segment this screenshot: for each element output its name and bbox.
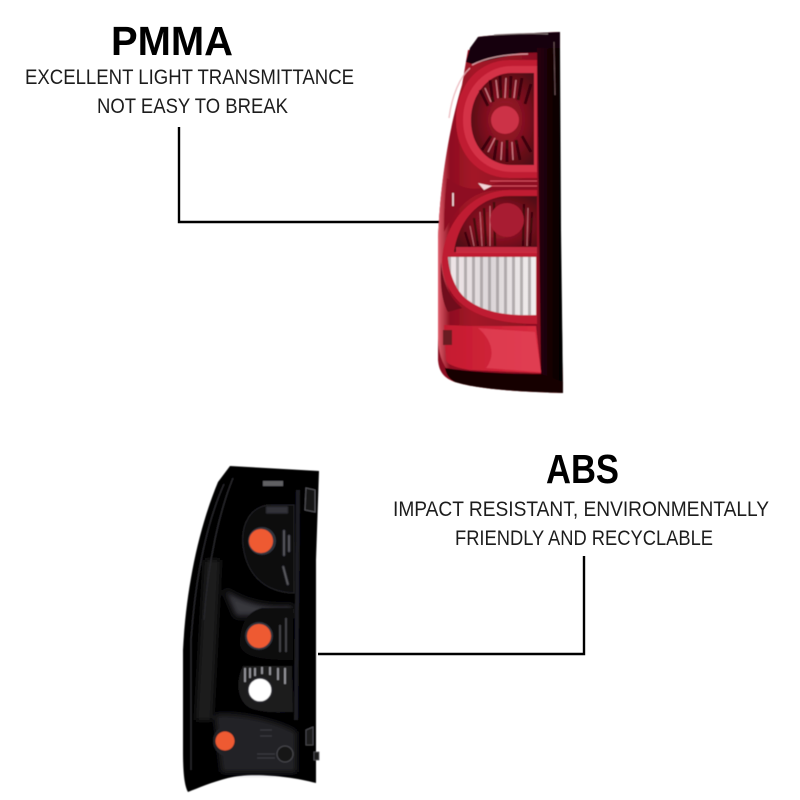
upper socket recess [243,505,294,593]
highlight lines [449,54,528,118]
middle socket reflections [280,618,286,652]
lower lens ring [442,190,537,324]
bottom orange socket [216,732,234,750]
middle orange socket [245,622,273,650]
dark side shadow [441,262,462,312]
white reverse lens [448,257,536,315]
lower socket reflections [245,667,285,684]
back housing [183,466,319,792]
text block: PMMA properties [25,66,354,118]
lamp red body [438,50,538,372]
text block: PMMA properties: NOT EASY TO BREAK [97,95,288,118]
round screw boss [277,746,293,762]
bottom clip [306,727,319,760]
upper lens facets [480,76,531,162]
heading: PMMA: PMMA [111,18,233,64]
heading: ABS: ABS [546,446,619,492]
middle socket recess [240,608,293,660]
lamp outer housing [438,32,563,393]
black right band [537,48,563,393]
lower socket recess [238,666,293,712]
white lens ribs [448,257,538,317]
text block: ABS properties [393,498,769,550]
text block: ABS properties: IMPACT RESISTANT, ENVIRONMENTALLY [393,498,769,521]
white socket [248,678,272,702]
right vertical rib [296,490,298,720]
top clip [305,488,315,512]
black bottom edge [445,368,563,393]
upper lens ring [456,60,537,178]
upper socket reflections [266,510,289,585]
moulded text marks [257,730,275,758]
upper orange socket [248,527,276,555]
icon: back of black tail light [183,466,319,792]
side marker [443,330,452,345]
icon: front of red tail light [438,32,563,393]
bottom orange socket recess [213,725,245,757]
top highlight [263,481,283,486]
text block: ABS properties: FRIENDLY AND RECYCLABLE [455,527,713,550]
divider between lenses [444,178,537,232]
housing soft highlights [196,560,296,772]
arrow: PMMA leader line [179,127,440,222]
upper lens centre dome [488,103,522,137]
lower red reflector [444,325,541,373]
lower red lens [454,196,537,252]
left edge highlights [191,478,233,770]
arrow: ABS leader line [318,556,584,654]
upper lens [471,73,534,165]
text block: PMMA properties: EXCELLENT LIGHT TRANSMITTANCE [25,66,354,89]
black top edge [466,32,560,64]
lower lens facets [465,202,532,248]
lower lens centre dome [490,203,524,237]
